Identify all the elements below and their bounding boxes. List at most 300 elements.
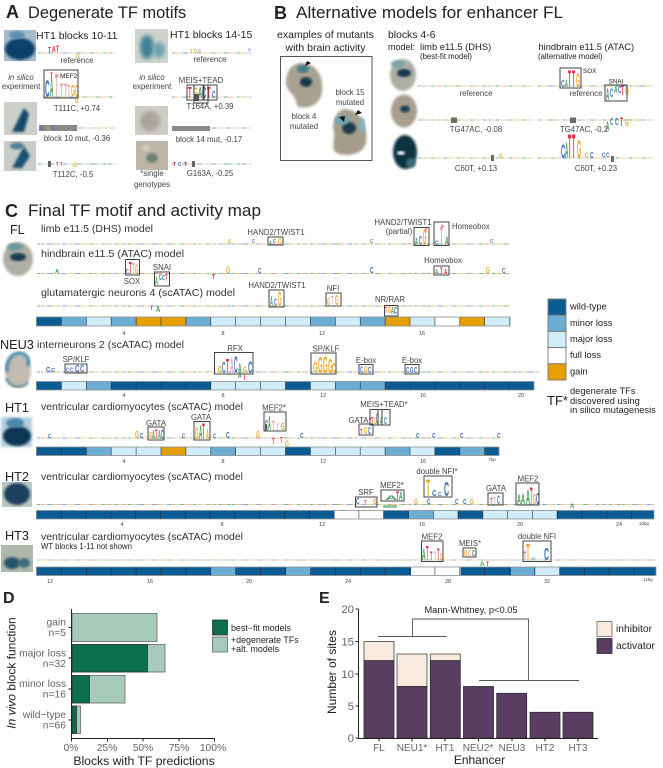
motif: MEIS star: G (464, 550, 467, 559)
motif: MEF2 star: T (272, 419, 275, 434)
heading: blocks 4-6: blocks 4-6 (388, 30, 436, 41)
motif box: SOX: SOX (583, 68, 597, 75)
tick labels: HT1 (122, 457, 496, 465)
motif: GATA HT2: C (497, 493, 500, 507)
logo: hindbrain C60T: A (565, 140, 568, 164)
motif: RFX: C (234, 351, 238, 379)
panel C title: Final TF motif and activity map (28, 202, 261, 220)
motif box: MEIS+TEAD (172, 76, 251, 103)
logo: T112C: T (56, 162, 59, 167)
motif: NFI: T (331, 294, 333, 309)
motif: MEF2 HT2: A (526, 488, 530, 509)
motif: Homeobox limb (434, 221, 490, 251)
caption: TG47AC limb: TG47AC, -0.08 (450, 125, 502, 134)
caption: TG47AC hindbrain: TG47AC, -0.2 (560, 125, 608, 134)
logo track: hindbrain: G (226, 264, 230, 275)
motif: double NFI star: C (438, 492, 442, 498)
motif: HAND2/TWIST1 limb: G (278, 236, 282, 247)
heading: HT1 blocks 10-11: HT1 blocks 10-11 (36, 30, 118, 42)
box: examples of mutants (280, 56, 372, 160)
embryo: HT3 (1, 545, 33, 572)
motif box: MEF2: G (71, 81, 75, 100)
x tick labels: HT1 (436, 743, 455, 754)
heading: examples of mutants: with brain activity (285, 42, 366, 54)
motif box: MEIS+TEAD: C (212, 89, 216, 101)
motif box: MEF2: T (55, 69, 58, 105)
motif: SNAI: A (155, 274, 158, 288)
caption: reference limb: reference (460, 89, 492, 98)
logo track: hindbrain: C (502, 267, 506, 275)
panel E: stacked bar chart of sites per enhancer (319, 590, 655, 767)
embryo: NEU3 (5, 353, 31, 388)
motif box: MEF2: T (50, 73, 54, 79)
track title: HT3: ventricular cardiomyocytes (scATAC) model (41, 532, 243, 543)
motif: GATA first: GATA (146, 419, 167, 428)
activity heatmap: HT2 (36, 510, 654, 519)
logo track: HT1: C (432, 432, 436, 440)
logo track: HT1: T (280, 437, 283, 446)
logo: hindbrain C60T: T (572, 129, 575, 166)
motif: NR/RAR: A (391, 305, 394, 317)
logo: limb C60T: G (499, 154, 503, 160)
y tick labels: 5 (348, 701, 354, 713)
motif: E-box second: E-box (402, 356, 422, 365)
y category labels: n=66 (43, 720, 66, 732)
motif: double NFI: C (544, 544, 549, 564)
motif: GATA second: A (199, 422, 202, 443)
logo: hindbrain TG47AC: C (615, 116, 619, 128)
logo track: hindbrain: C (258, 267, 262, 275)
motif: double NFI: T (526, 540, 530, 565)
y tick labels: 0 (348, 733, 354, 745)
motif: MEIS+TEAD star: A (380, 415, 383, 427)
motif: HAND2/TWIST1 partial: HAND2/TWIST1 (374, 218, 432, 227)
motif: HAND2/TWIST1 partial (374, 218, 432, 251)
motif box: SOX: C (561, 78, 565, 90)
y category labels: n=16 (43, 690, 66, 700)
motif: RFX: A (230, 355, 234, 379)
label: FL: FL (10, 223, 25, 237)
embryo: block 15 mutated (333, 109, 366, 155)
tick labels: HT3 (47, 577, 653, 585)
motif: RFX: G (218, 364, 222, 376)
motif: MEF2 star: A (268, 413, 271, 436)
motif: Homeobox hindbrain: T (440, 266, 443, 277)
tick labels: FL (122, 331, 425, 337)
motif: SP/KLF second: G (318, 352, 323, 378)
enhancer HT1 section (1, 400, 501, 465)
logo: reference block 14-15: C (248, 47, 251, 52)
legend: degenerate TFs note: degenerate TFs (570, 386, 636, 396)
motif: SRF: G (373, 498, 377, 506)
x tick labels (373, 743, 588, 754)
motif: GATA first: T (155, 428, 158, 443)
motif: SP/KLF first: SP/KLF (63, 355, 90, 364)
tick labels: HT2: 8 (220, 522, 224, 528)
motif: GATA first: G (149, 430, 152, 442)
tick labels: HT3: 20 (246, 579, 252, 585)
motif: NR/RAR: NR/RAR (375, 295, 405, 304)
motif: HAND2/TWIST1 partial: T (425, 228, 427, 235)
motif: MEIS+TEAD star: T (371, 415, 374, 427)
motif: MEIS star: MEIS* (459, 539, 481, 548)
y axis title: In vivo block function (4, 617, 18, 729)
motif: SOX: SOX (124, 277, 141, 286)
logo track: HT1: G (135, 429, 139, 441)
caption: block 10 mut: block 10 mut, -0.36 (44, 134, 110, 143)
logo track: HT1: C (460, 432, 464, 440)
panel B: alternative models for enhancer FL (274, 3, 653, 173)
activity heatmap: FL (36, 317, 510, 326)
motif: GATA HT2: T (493, 495, 496, 507)
logo track: HT1: C (416, 432, 420, 440)
motif: MEIS star: C (472, 550, 475, 559)
motif: NR/RAR: G (388, 307, 391, 316)
tick labels: HT3: 12 (47, 579, 53, 585)
motif: SNAI: SNAI (153, 263, 171, 272)
tick labels: FL: 12 (319, 331, 325, 337)
track title: interneurons: interneurons 2 (scATAC) model (37, 340, 184, 351)
motif: SP/KLF first: C (80, 364, 84, 374)
motif: double NFI: T (524, 549, 526, 563)
logo track: NEU3: C (46, 367, 51, 374)
logo: reference block 14-15: C (198, 48, 201, 53)
motif: MEIS star (459, 539, 481, 559)
motif: MEF2 star: C (265, 418, 268, 434)
axes (68, 609, 215, 742)
motif: MEF2 HT2: G (533, 492, 536, 508)
tick labels: HT1: 12 (320, 459, 326, 465)
logo track: HT1: C (213, 433, 216, 440)
logo track: NEU3: A (238, 369, 242, 380)
motif box: SNAI: SNAI (609, 78, 624, 86)
tick labels: HT2 (120, 521, 650, 528)
motif: SP/KLF first: C (75, 364, 79, 374)
logo track: HT2: G (414, 498, 418, 506)
tick labels: HT1: 8 (221, 459, 225, 465)
tick labels: HT2: 24 (616, 522, 622, 528)
tick labels: FL: 8 (221, 331, 225, 337)
enhancer NEU3 section (0, 338, 540, 399)
y category labels (19, 618, 66, 732)
motif box: SNAI: G (625, 85, 629, 97)
caption: block 4 mutated: mutated (290, 122, 318, 131)
motif: SP/KLF first: C (66, 368, 70, 374)
y tick labels (341, 604, 354, 745)
motif: Homeobox hindbrain: A (444, 269, 448, 276)
caption: in silico experiment left: in silico (8, 73, 34, 82)
motif: double NFI star: C (444, 479, 449, 501)
y tick labels: 10 (341, 669, 354, 681)
tick labels: HT3: 28 (445, 579, 451, 585)
logo track: hindbrain: C (370, 267, 374, 275)
stacked bars (72, 614, 165, 734)
logo: T112C: T (60, 162, 63, 167)
motif: SOX (124, 258, 141, 286)
motif: MEF2 HT3 (422, 532, 443, 566)
panel letter A: A (6, 2, 19, 22)
motif: NR/RAR (375, 295, 405, 317)
logo: reference block 14-15: T (190, 49, 193, 54)
motif: NFI: G (335, 293, 338, 309)
track title: limb model: limb e11.5 (DHS) model (41, 224, 153, 235)
motif: MEIS+TEAD star: MEIS+TEAD* (360, 400, 408, 409)
logo: G163A: T (184, 162, 187, 168)
motif box: MEIS+TEAD: T (207, 83, 211, 102)
tick labels: HT1: 16 (420, 459, 426, 465)
motif: MEF2 HT3: T (426, 543, 428, 566)
logo track: HT1: C (140, 433, 144, 440)
motif: HAND2/TWIST1 partial: G (423, 224, 427, 251)
legend labels: gain (570, 366, 588, 376)
x axis title: Blocks with TF predictions (73, 754, 215, 768)
logo track: limb: C (370, 239, 374, 244)
motif box: MEF2: A (50, 70, 53, 104)
legend labels: full loss (570, 350, 601, 360)
caption: reference right: reference (194, 55, 226, 64)
logo track: HT1: T (272, 438, 275, 447)
motif: GATA star: G (364, 425, 367, 437)
motif box: SNAI: C (610, 86, 613, 100)
motif box: MEF2: G (75, 81, 79, 101)
x tick labels: 0% (64, 743, 78, 754)
motif: double NFI: C (532, 556, 536, 561)
motif: GATA second: GATA (191, 413, 212, 422)
motif: E-box second: C (406, 367, 409, 375)
significance label: Mann-Whitney, p<0.05 (424, 605, 518, 615)
logo track: limb (37, 239, 510, 244)
label: NEU3: NEU3 (0, 338, 34, 352)
legend: best−fit models (231, 623, 291, 633)
logo track: HT1: C (497, 432, 501, 440)
caption: block 15 mutated: mutated (336, 98, 364, 107)
legend: +alt. models (231, 644, 280, 654)
caption: T111C: T111C, +0.74 (54, 104, 101, 113)
logo: hindbrain C60T: C (602, 153, 606, 159)
panel A: degenerate TF motifs (2, 2, 252, 189)
motif: SNAI: C (159, 274, 162, 283)
logo track: HT1: G (285, 438, 289, 449)
logo: G163A: C (178, 162, 182, 168)
x tick labels: HT2 (536, 743, 555, 754)
motif: E-box first: C (360, 365, 363, 376)
legend (597, 622, 655, 654)
motif: MEIS+TEAD star: C (384, 415, 387, 427)
motif box: SOX: T (572, 65, 575, 93)
caption: in silico experiment right: experiment (133, 82, 172, 91)
motif: E-box second: C (414, 367, 417, 375)
activity heatmap: HT1 (36, 447, 499, 456)
image: block 10 mutant heart (4, 102, 37, 135)
motif: SOX: T (129, 258, 132, 278)
logo track: HT1: C (300, 432, 304, 440)
enhancer FL section (3, 218, 510, 337)
embryo: HT1 (1, 417, 32, 447)
logo track: HT1 (37, 429, 501, 449)
logo track: limb: C (252, 239, 256, 244)
motif: MEF2 star: G (281, 420, 284, 433)
motif: Homeobox limb: A (445, 235, 449, 248)
caption: C60T hindbrain: C60T, +0.23 (575, 164, 617, 173)
motif: SP/KLF first: C (70, 368, 74, 374)
track title: glutamatergic model: glutamatergic neurons 4 (scATAC) model (41, 288, 235, 299)
motif box: MEF2 (44, 69, 115, 106)
label: model: model: (388, 42, 415, 52)
logo track: NEU3 (37, 367, 540, 382)
motif: MEF2 HT2: A (517, 492, 521, 508)
motif: double NFI (518, 532, 556, 565)
motif: MEF2 star HT2: A (399, 490, 403, 503)
motif box: MEF2: T (64, 79, 68, 101)
motif: RFX (214, 344, 253, 379)
motif: Homeobox limb: A (441, 223, 444, 228)
tick labels: HT1: 7bp (488, 457, 496, 462)
heading: hindbrain e11.5 (ATAC): hindbrain e11.5 (ATAC) (538, 42, 634, 52)
motif: SP/KLF second: C (332, 361, 336, 377)
logo: reference block 14-15 (172, 47, 251, 55)
logo: T112C (38, 161, 115, 169)
y category labels: n=5 (49, 628, 66, 639)
motif: E-box first: E-box (356, 356, 376, 365)
logo: hindbrain C60T: C (585, 152, 589, 160)
axes (356, 609, 598, 742)
legend swatches (548, 299, 566, 380)
motif: SRF: SRF (358, 488, 374, 497)
motif: NR/RAR: T (385, 307, 387, 316)
motif: E-box first: C (368, 365, 371, 376)
caption: block 14 mut: block 14 mut, -0.17 (176, 135, 242, 144)
motif: double NFI star (416, 467, 458, 501)
motif: MEF2 star HT2: A (385, 494, 397, 501)
caption: block 4 mutated: block 4 (292, 112, 317, 121)
tick labels: FL: 4 (122, 331, 126, 337)
logo: hindbrain C60T (538, 129, 653, 166)
tick labels: HT2: 20 (517, 522, 523, 528)
caption: in silico experiment left: experiment (2, 82, 41, 91)
motif: GATA first: C (161, 428, 164, 443)
motif: SRF: T (364, 500, 367, 505)
caption: T164A: T164A, +0.39 (186, 102, 234, 111)
motif: HAND2/TWIST1 limb: C (273, 239, 277, 244)
logo: reference block 10-11: A (52, 46, 56, 54)
motif: GATA HT2: T (490, 498, 493, 507)
motif box: MEF2: G (75, 95, 79, 106)
caption: reference hindbrain: reference (570, 89, 602, 98)
motif: NR/RAR: C (394, 305, 397, 317)
logo track: glutamatergic (37, 306, 510, 314)
panel C: final TF motif and activity map (0, 201, 656, 585)
legend: degenerate TFs note: discovered using (570, 396, 640, 406)
tick labels: HT2: 4 (120, 522, 124, 528)
logo: hindbrain C60T: C (606, 153, 610, 159)
logo: hindbrain TG47AC: G (625, 117, 629, 129)
motif box: SOX: T (568, 65, 571, 93)
motif: MEF2 HT3: T (434, 549, 437, 563)
motif: SP/KLF second: SP/KLF (313, 344, 340, 354)
note: WT blocks not shown: WT blocks 1-11 not shown (41, 542, 132, 551)
embryo: reference (390, 59, 416, 91)
tick labels: HT3: 24 (345, 579, 351, 585)
motif box: SNAI: C (618, 84, 622, 96)
motif: MEIS+TEAD star: C (376, 410, 379, 428)
motif box: SOX (538, 65, 653, 93)
motif: GATA HT2 (486, 484, 507, 507)
legend labels (569, 302, 613, 376)
logo: hindbrain TG47AC: C (610, 116, 613, 128)
logo: hindbrain TG47AC (538, 116, 653, 135)
motif: E-box second (402, 356, 422, 375)
motif: MEF2 HT2: C (536, 490, 539, 508)
y axis title: Number of sites (325, 630, 339, 714)
y tick labels: 15 (341, 636, 354, 648)
y category labels: n=32 (43, 659, 66, 670)
logo: hindbrain C60T: T (568, 129, 571, 166)
caption: T112C: T112C, -0.5 (53, 170, 94, 179)
logo: reference block 14-15: G (194, 48, 197, 55)
motif box: SNAI: A (614, 84, 618, 96)
tick labels: HT3: 11bp (643, 577, 653, 582)
logo track: limb: G (228, 239, 232, 244)
motif: GATA first: A (158, 428, 161, 442)
enhancer HT3 section (1, 529, 656, 585)
legend (212, 620, 299, 654)
motif box: SOX: A (565, 78, 568, 90)
motif: Homeobox limb: C (435, 241, 439, 247)
logo track: HT3 (37, 560, 656, 568)
motif: MEF2 HT2: A (521, 492, 525, 508)
motif: SP/KLF second: G (313, 358, 318, 377)
logo track: HT2: C (463, 498, 467, 506)
motif: SNAI: T (165, 272, 168, 284)
panel A title: Degenerate TF motifs (28, 4, 186, 22)
logo track: glutamatergic: T (150, 306, 154, 312)
tick labels: HT3: 32 (544, 579, 550, 585)
motif: SOX: C (126, 269, 129, 276)
motif: MEF2 HT3: G (440, 551, 442, 563)
motif: MEIS+TEAD star (360, 400, 408, 428)
image: G163A mutant heart (136, 141, 168, 170)
motif: GATA second (191, 413, 212, 445)
logo: limb reference (418, 85, 534, 87)
caption: single genotypes: *single (140, 169, 164, 178)
motif: double NFI star: double NFI* (416, 467, 458, 476)
x tick labels: HT3 (569, 743, 588, 754)
caption: single genotypes: genotypes (134, 180, 170, 189)
legend labels: minor loss (570, 318, 613, 328)
tick labels: NEU3: 8 (221, 393, 225, 399)
motif: NFI: NFI (327, 284, 339, 293)
logo track: HT2: C (427, 498, 431, 506)
motif: Homeobox limb: T (440, 221, 443, 251)
motif: SOX: T (132, 260, 135, 278)
logo track: NEU3: C (51, 368, 55, 374)
x tick labels: 75% (169, 743, 189, 754)
significance bracket (378, 619, 579, 680)
image: T112C mutant heart (4, 141, 36, 171)
motif: MEF2 HT3: MEF2 (422, 532, 442, 542)
logo: reference block 10-11: T (48, 47, 51, 55)
motif: double NFI: double NFI (518, 532, 556, 541)
logo track: HT3: A (480, 562, 485, 568)
legend: TF star: TF* (547, 393, 568, 408)
motif: HAND2/TWIST1 glutamatergic (248, 281, 306, 312)
logo: reference block 10-11 (38, 43, 115, 60)
motif: E-box first: G (364, 365, 368, 376)
x tick labels: NEU3 (499, 743, 526, 754)
x tick labels: FL (373, 743, 385, 754)
legend: degenerate TFs note: in silico mutagenesis (570, 405, 656, 415)
motif box: MEF2: MEF2 (60, 73, 78, 80)
